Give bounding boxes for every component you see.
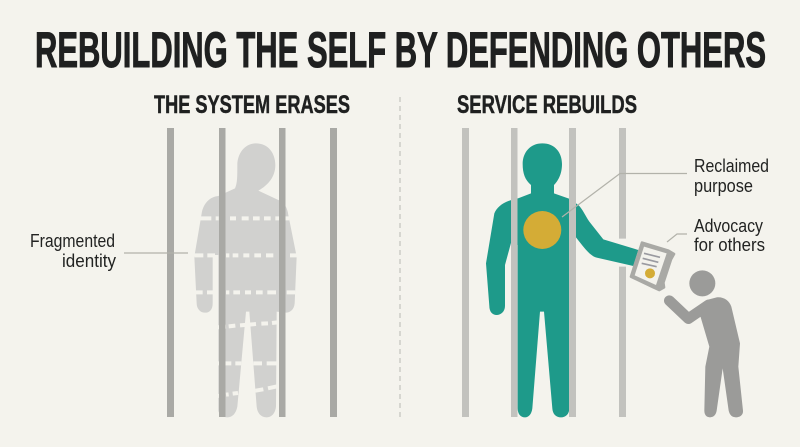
callout: fragmented identity: identity (62, 250, 117, 271)
fourth prison bar (619, 128, 626, 417)
prison bars (167, 128, 337, 417)
callout: fragmented identity: Fragmented (30, 230, 115, 251)
heading: the system erases: THE SYSTEM ERASES (154, 91, 350, 119)
callout: advocacy for others: for others (694, 234, 765, 255)
panel: service rebuilds (462, 128, 769, 417)
panel: the system erases (30, 128, 337, 417)
heading: service rebuilds: SERVICE REBUILDS (457, 91, 637, 119)
fragmented grey figure (193, 143, 297, 417)
grey person receiving help (669, 270, 743, 417)
callout: reclaimed purpose: purpose (694, 175, 753, 196)
teal figure (486, 143, 638, 417)
prison bars (462, 128, 576, 417)
callout: fragmented identity (30, 230, 188, 271)
icon: gold heart circle (523, 211, 561, 249)
icon: document scroll (631, 243, 674, 290)
callout: reclaimed purpose: Reclaimed (694, 155, 769, 176)
callout: advocacy for others: Advocacy (694, 215, 764, 236)
callout: advocacy for others (667, 215, 765, 255)
callout: reclaimed purpose (562, 155, 769, 217)
